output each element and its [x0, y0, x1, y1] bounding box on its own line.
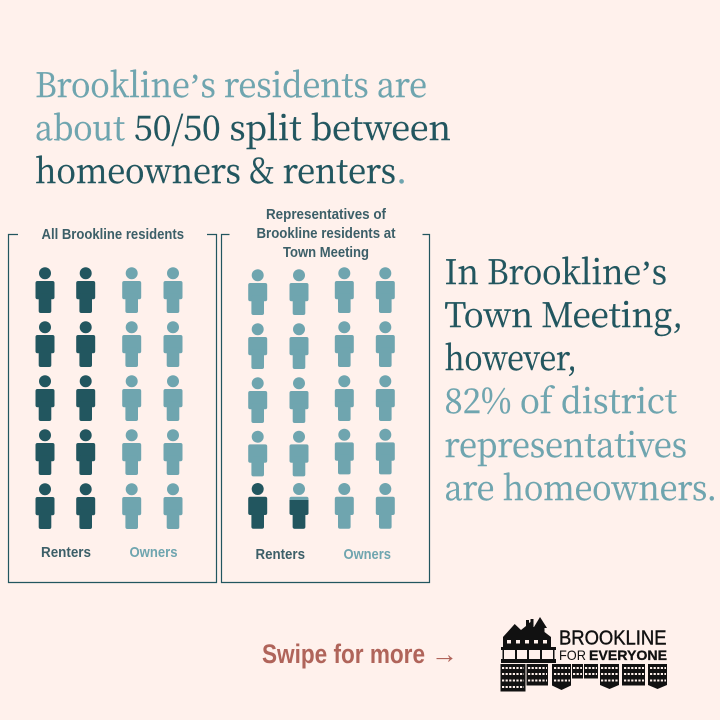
renters icons, left panel: [36, 267, 95, 529]
panel heading: representatives: Representatives of: [266, 206, 387, 223]
owners icons, right panel: [248, 267, 395, 529]
label: owners: Owners: [344, 546, 391, 563]
panel: representatives at Town Meeting: [222, 206, 430, 582]
title: about: [35, 101, 125, 150]
call to action: →: [431, 639, 458, 669]
renter icons, right panel: [248, 483, 308, 529]
side statement: [444, 245, 717, 510]
side statement: 82% of district: [444, 374, 677, 423]
panel heading: all residents: All Brookline residents: [42, 226, 184, 243]
logo: Brookline for Everyone: [500, 617, 667, 692]
side statement: Town Meeting,: [444, 288, 683, 337]
title: [35, 58, 451, 193]
panel: all Brookline residents: [8, 226, 216, 582]
logo wordmark: [559, 628, 667, 663]
title: homeowners & renters: [35, 144, 396, 193]
logo wordmark: EVERYONE: [589, 647, 667, 663]
side statement: In Brookline’s: [444, 245, 667, 294]
side statement: representatives: [444, 418, 687, 467]
logo wordmark: BROOKLINE: [559, 628, 666, 650]
title: .: [396, 144, 407, 193]
logo wordmark: FOR: [559, 647, 586, 663]
call to action: Swipe for more: [262, 639, 425, 669]
title: 50/50 split between: [134, 101, 451, 150]
side statement: however,: [444, 331, 577, 380]
icon: row of brownstones: [500, 664, 667, 692]
panel heading: representatives: [256, 206, 396, 261]
title: Brookline’s residents are: [35, 58, 427, 107]
owners icons, left panel: [122, 267, 182, 529]
panel heading: representatives: Brookline residents at: [256, 225, 396, 242]
label: renters: Renters: [41, 544, 91, 561]
label: owners: Owners: [130, 544, 178, 561]
label: renters: Renters: [256, 546, 305, 563]
icon: house: [501, 617, 556, 663]
panel heading: representatives: Town Meeting: [283, 244, 369, 261]
